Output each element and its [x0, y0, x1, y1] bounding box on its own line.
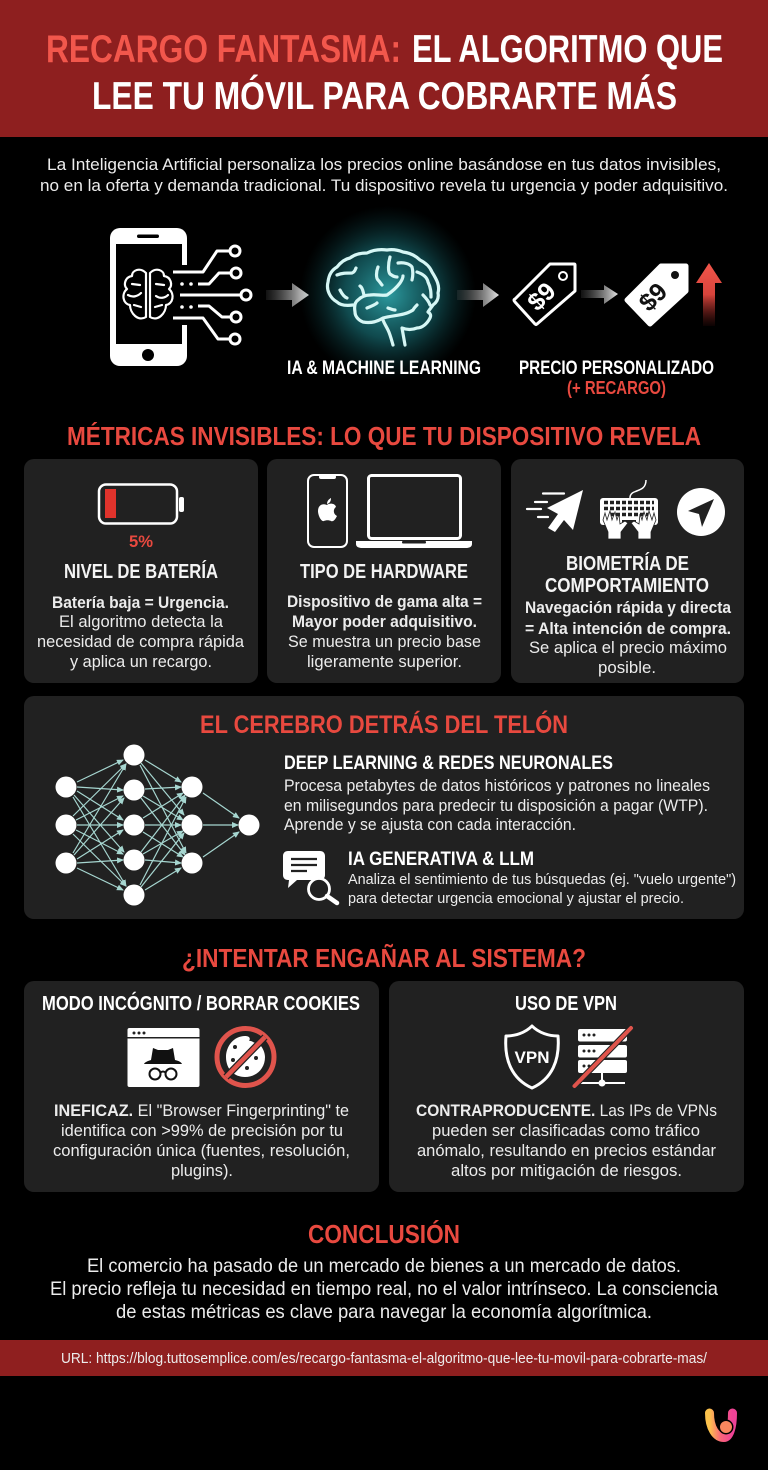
chart: neural network [56, 744, 260, 906]
panel: behavioural biometrics [511, 459, 744, 683]
text: hardware: Se muestra un precio base [288, 633, 481, 651]
text: ineffective: identifica con >99% de precisión por tu [61, 1122, 343, 1140]
text: deep learning: Procesa petabytes de datos históricos y patrones no lineales [284, 777, 710, 795]
icon: outlined price tag: $9 [522, 277, 562, 317]
arrow: brain to price [457, 283, 499, 307]
icon: smartphone with circuit brain [110, 228, 251, 366]
text: biometrics: posible. [598, 659, 656, 677]
heading: biometrics: COMPORTAMIENTO [545, 575, 709, 597]
text: conclusion: El precio refleja tu necesidad en tiempo real, no el valor intrínseco. La consciencia [50, 1278, 718, 1300]
text: battery: necesidad de compra rápida [37, 633, 245, 651]
heading: incognito: MODO INCÓGNITO / BORRAR COOKIES [42, 991, 360, 1015]
icon: glowing brain [300, 206, 476, 382]
icon: navigation circle [677, 488, 725, 536]
text: deep learning [284, 752, 710, 834]
text: counterproductive: altos por mitigación de riesgos. [451, 1162, 682, 1180]
icon: filled price tag: $9 [634, 278, 673, 317]
footer URL band [0, 1340, 768, 1376]
text: biometrics: = Alta intención de compra. [525, 620, 731, 638]
icon: outlined price tag [514, 264, 575, 324]
heading: biometrics [545, 552, 709, 597]
text: deep learning: Aprende y se ajusta con cada interacción. [284, 816, 576, 834]
label: IA and machine learning: IA & MACHINE LEARNING [287, 358, 481, 379]
title banner: RECARGO FANTASMA: [46, 28, 401, 71]
battery percent: 5% [129, 532, 153, 551]
title banner [0, 0, 768, 137]
icon: filled price tag [627, 266, 686, 324]
icon: incognito browser [128, 1028, 200, 1087]
text: biometrics: Navegación rápida y directa [525, 599, 732, 617]
text: battery: El algoritmo detecta la [59, 613, 224, 631]
heading: biometrics: BIOMETRÍA DE [566, 552, 689, 575]
panel: hardware type [267, 459, 501, 683]
heading: battery: NIVEL DE BATERÍA [64, 560, 218, 583]
text: generative AI: para detectar urgencia emocional y ajustar el precio. [348, 890, 684, 907]
text: generative AI: Analiza el sentimiento de tus búsquedas (ej. "vuelo urgente") [348, 871, 736, 888]
footer URL band: URL: https://blog.tuttosemplice.com/es/recargo-fantasma-el-algoritmo-que-lee-tu-movil-para-cobrarte-mas/ [61, 1351, 708, 1367]
text: hardware [287, 593, 482, 671]
icon: keyboard and hands [600, 480, 658, 539]
text: battery [37, 594, 245, 671]
icon: banned server [574, 1028, 631, 1086]
icon: smartphone and laptop [308, 475, 472, 548]
icon: banned cookie [217, 1028, 274, 1086]
text: battery: Batería baja = Urgencia. [52, 594, 229, 612]
icon: logo [710, 1413, 734, 1438]
text: deep learning: en milisegundos para predecir tu disposición a pagar (WTP). [284, 797, 708, 815]
text: counterproductive: CONTRAPRODUCENTE. Las IPs de VPNs [416, 1102, 717, 1120]
icon: fast cursor [527, 490, 583, 532]
label: personalized price [519, 358, 714, 398]
icon: chat with magnifier [283, 851, 337, 903]
text: ineffective: INEFICAZ. El "Browser Fingerprinting" te [54, 1102, 349, 1120]
label: personalized price: PRECIO PERSONALIZADO [519, 358, 714, 379]
intro text: no en la oferta y demanda tradicional. Tu dispositivo revela tu urgencia y poder adquisitivo. [40, 176, 728, 195]
intro text [40, 155, 728, 195]
text: generative AI [348, 848, 736, 907]
label: personalized price: (+ RECARGO) [567, 378, 666, 398]
text: battery: y aplica un recargo. [70, 653, 212, 671]
heading: conclusion: CONCLUSIÓN [308, 1219, 460, 1249]
panel: VPN use [389, 981, 744, 1192]
text: counterproductive [416, 1102, 717, 1180]
text: counterproductive: anómalo, resultando en precios estándar [417, 1142, 716, 1160]
text: ineffective: plugins). [171, 1162, 233, 1180]
arrow: price to surcharge [581, 285, 618, 304]
panel: incognito mode [24, 981, 379, 1192]
text: conclusion [50, 1255, 718, 1323]
text: deep learning: DEEP LEARNING & REDES NEURONALES [284, 752, 613, 774]
heading: brain behind: EL CEREBRO DETRÁS DEL TELÓN [200, 709, 568, 739]
panel: the brain behind the curtain [24, 696, 744, 919]
text: ineffective [53, 1102, 350, 1180]
text: conclusion: El comercio ha pasado de un mercado de bienes a un mercado de datos. [87, 1255, 681, 1277]
arrow: phone to brain [266, 283, 309, 307]
heading: hardware: TIPO DE HARDWARE [300, 561, 468, 583]
panel: battery level [24, 459, 258, 683]
icon: VPN shield [506, 1026, 558, 1088]
text: biometrics [525, 599, 732, 677]
text: ineffective: configuración única (fuentes, resolución, [53, 1142, 350, 1160]
text: counterproductive: pueden ser clasificadas como tráfico [432, 1122, 700, 1140]
heading: trick the system: ¿INTENTAR ENGAÑAR AL SISTEMA? [182, 943, 586, 973]
text: hardware: Mayor poder adquisitivo. [292, 613, 477, 631]
icon: VPN shield: VPN [515, 1048, 549, 1067]
icon: battery [99, 484, 184, 524]
icon: red up arrow [696, 263, 722, 326]
intro text: La Inteligencia Artificial personaliza los precios online basándose en tus datos invisibles, [47, 155, 721, 174]
text: conclusion: de estas métricas es clave para navegar la economía algorítmica. [116, 1301, 652, 1323]
text: hardware: Dispositivo de gama alta = [287, 593, 482, 611]
text: hardware: ligeramente superior. [307, 653, 462, 671]
text: biometrics: Se aplica el precio máximo [529, 639, 727, 657]
heading: VPN: USO DE VPN [515, 993, 617, 1015]
text: generative AI: IA GENERATIVA & LLM [348, 848, 534, 870]
